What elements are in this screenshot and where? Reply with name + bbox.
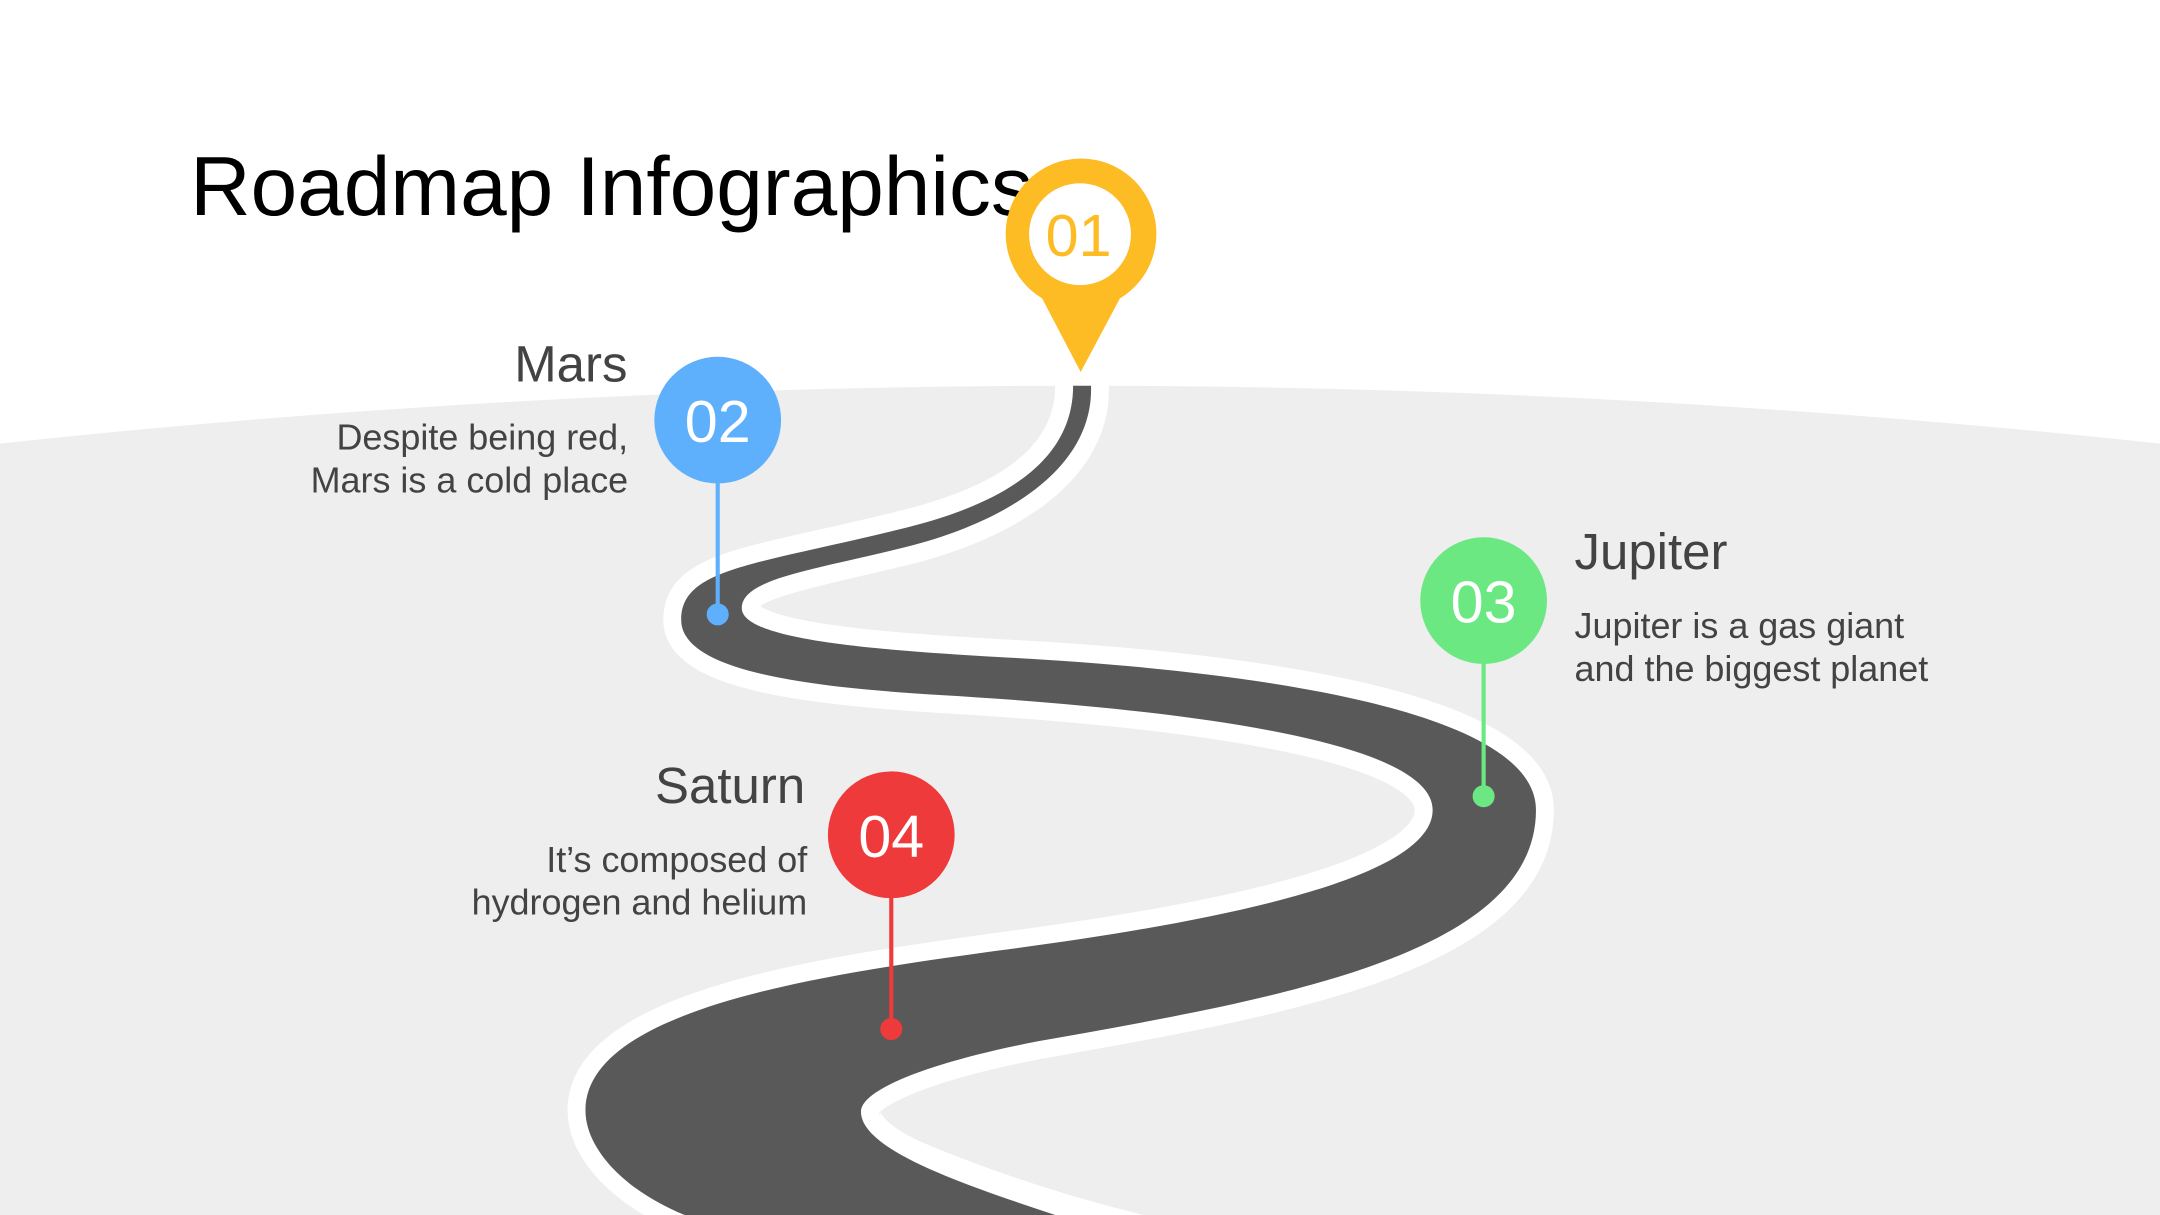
text: Mars: Mars is a cold place [311, 459, 628, 500]
marker 03 [1420, 537, 1547, 807]
text: Jupiter [1575, 523, 1928, 689]
text: Jupiter: Jupiter [1575, 523, 1728, 580]
text: Mars: Despite being red, [336, 417, 628, 458]
text: Jupiter: Jupiter is a gas giant [1575, 605, 1904, 646]
pin 01 [1006, 159, 1156, 372]
marker 04: 04 [858, 803, 924, 870]
marker 02: 02 [685, 388, 751, 455]
marker 02 [654, 357, 781, 625]
text: Saturn: It’s composed of [546, 839, 808, 880]
winding road [585, 372, 1536, 1215]
marker 04 [828, 771, 955, 1040]
marker 03: 03 [1451, 569, 1517, 636]
text: Mars: Mars [514, 336, 627, 393]
text: Jupiter: and the biggest planet [1575, 648, 1928, 689]
text: Saturn: hydrogen and helium [472, 882, 807, 923]
ground background [0, 386, 2160, 1215]
text: Mars [311, 336, 628, 500]
pin 01: 01 [1046, 202, 1112, 269]
title: Roadmap Infographics [190, 139, 1033, 233]
text: Saturn [472, 757, 808, 923]
text: Saturn: Saturn [655, 757, 805, 814]
